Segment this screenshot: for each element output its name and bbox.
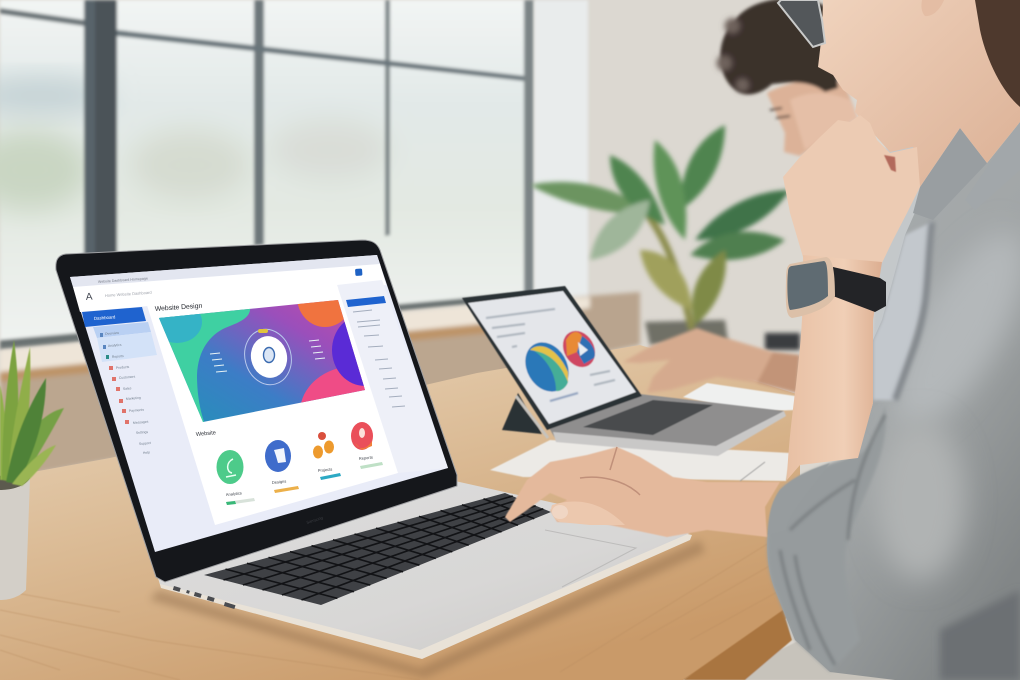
left sidebar: Products <box>116 365 130 370</box>
smart watch <box>786 257 886 318</box>
heading: Website Design <box>155 303 203 313</box>
wooden table <box>0 345 800 680</box>
left sidebar: Marketing <box>126 396 141 401</box>
face and neck <box>818 0 1020 187</box>
left sidebar: Settings <box>136 430 149 435</box>
shirt folds <box>780 415 885 665</box>
laptop base <box>158 483 692 659</box>
laptop <box>56 240 705 678</box>
service card: red: Reports <box>359 455 373 461</box>
browser bar <box>70 255 380 287</box>
left sidebar: Overview <box>105 331 120 336</box>
service card: green <box>216 450 255 505</box>
service card: orange dots <box>313 432 341 480</box>
window side panel <box>534 0 588 300</box>
second person <box>623 0 960 400</box>
lid bezel <box>56 240 457 582</box>
hand on trackpad <box>505 447 780 537</box>
left sidebar: Reports <box>112 354 124 359</box>
shirt shading <box>767 215 1020 680</box>
tablet with pie charts <box>462 286 786 456</box>
collar <box>913 128 987 220</box>
screen background <box>70 255 448 552</box>
section label: Website <box>196 430 216 438</box>
hair <box>975 0 1020 107</box>
browser address area <box>73 264 386 312</box>
table front edge and floor <box>683 610 940 680</box>
left sidebar: Messages <box>133 420 149 425</box>
service card: orange dots: Projects <box>318 467 332 473</box>
shirt <box>767 122 1020 680</box>
laptop hinge label: Samsung <box>306 515 323 525</box>
laptop: Website Dashboard Homepage <box>98 277 148 284</box>
shirt sleeve over wrist <box>768 463 830 535</box>
service card: green: Analytics <box>226 490 242 497</box>
service card: blue <box>265 440 299 493</box>
ear <box>921 0 944 16</box>
left sidebar: Analytics <box>108 343 122 348</box>
ports <box>173 586 236 609</box>
main content panel <box>146 285 398 525</box>
glasses <box>778 0 825 47</box>
laptop: A <box>85 292 93 303</box>
left sidebar: Support <box>139 441 151 446</box>
laptop: Home Website Dashboard <box>105 290 152 298</box>
left sidebar: Payments <box>129 408 144 413</box>
keyboard <box>204 493 551 605</box>
left sidebar <box>82 307 157 455</box>
right sidebar items <box>346 296 405 407</box>
potted plant <box>0 340 64 600</box>
table shadow <box>150 540 705 678</box>
blurred background plant <box>530 125 800 350</box>
background paper sheets <box>490 383 795 481</box>
left sidebar: Dashboard <box>94 314 116 321</box>
trackpad <box>545 530 636 587</box>
window <box>0 0 534 350</box>
forearm <box>787 255 882 480</box>
service card: red <box>351 422 383 469</box>
hero banner <box>159 300 365 422</box>
foreground person <box>767 0 1020 680</box>
right sidebar <box>337 280 448 473</box>
left sidebar: Sales <box>123 386 132 391</box>
left sidebar: Help <box>143 450 150 455</box>
service card: blue: Designs <box>272 479 286 485</box>
left sidebar: Customers <box>119 375 136 380</box>
finger shadow <box>884 155 896 172</box>
fist on chin <box>783 115 920 263</box>
window sill and lower wall <box>0 292 640 480</box>
